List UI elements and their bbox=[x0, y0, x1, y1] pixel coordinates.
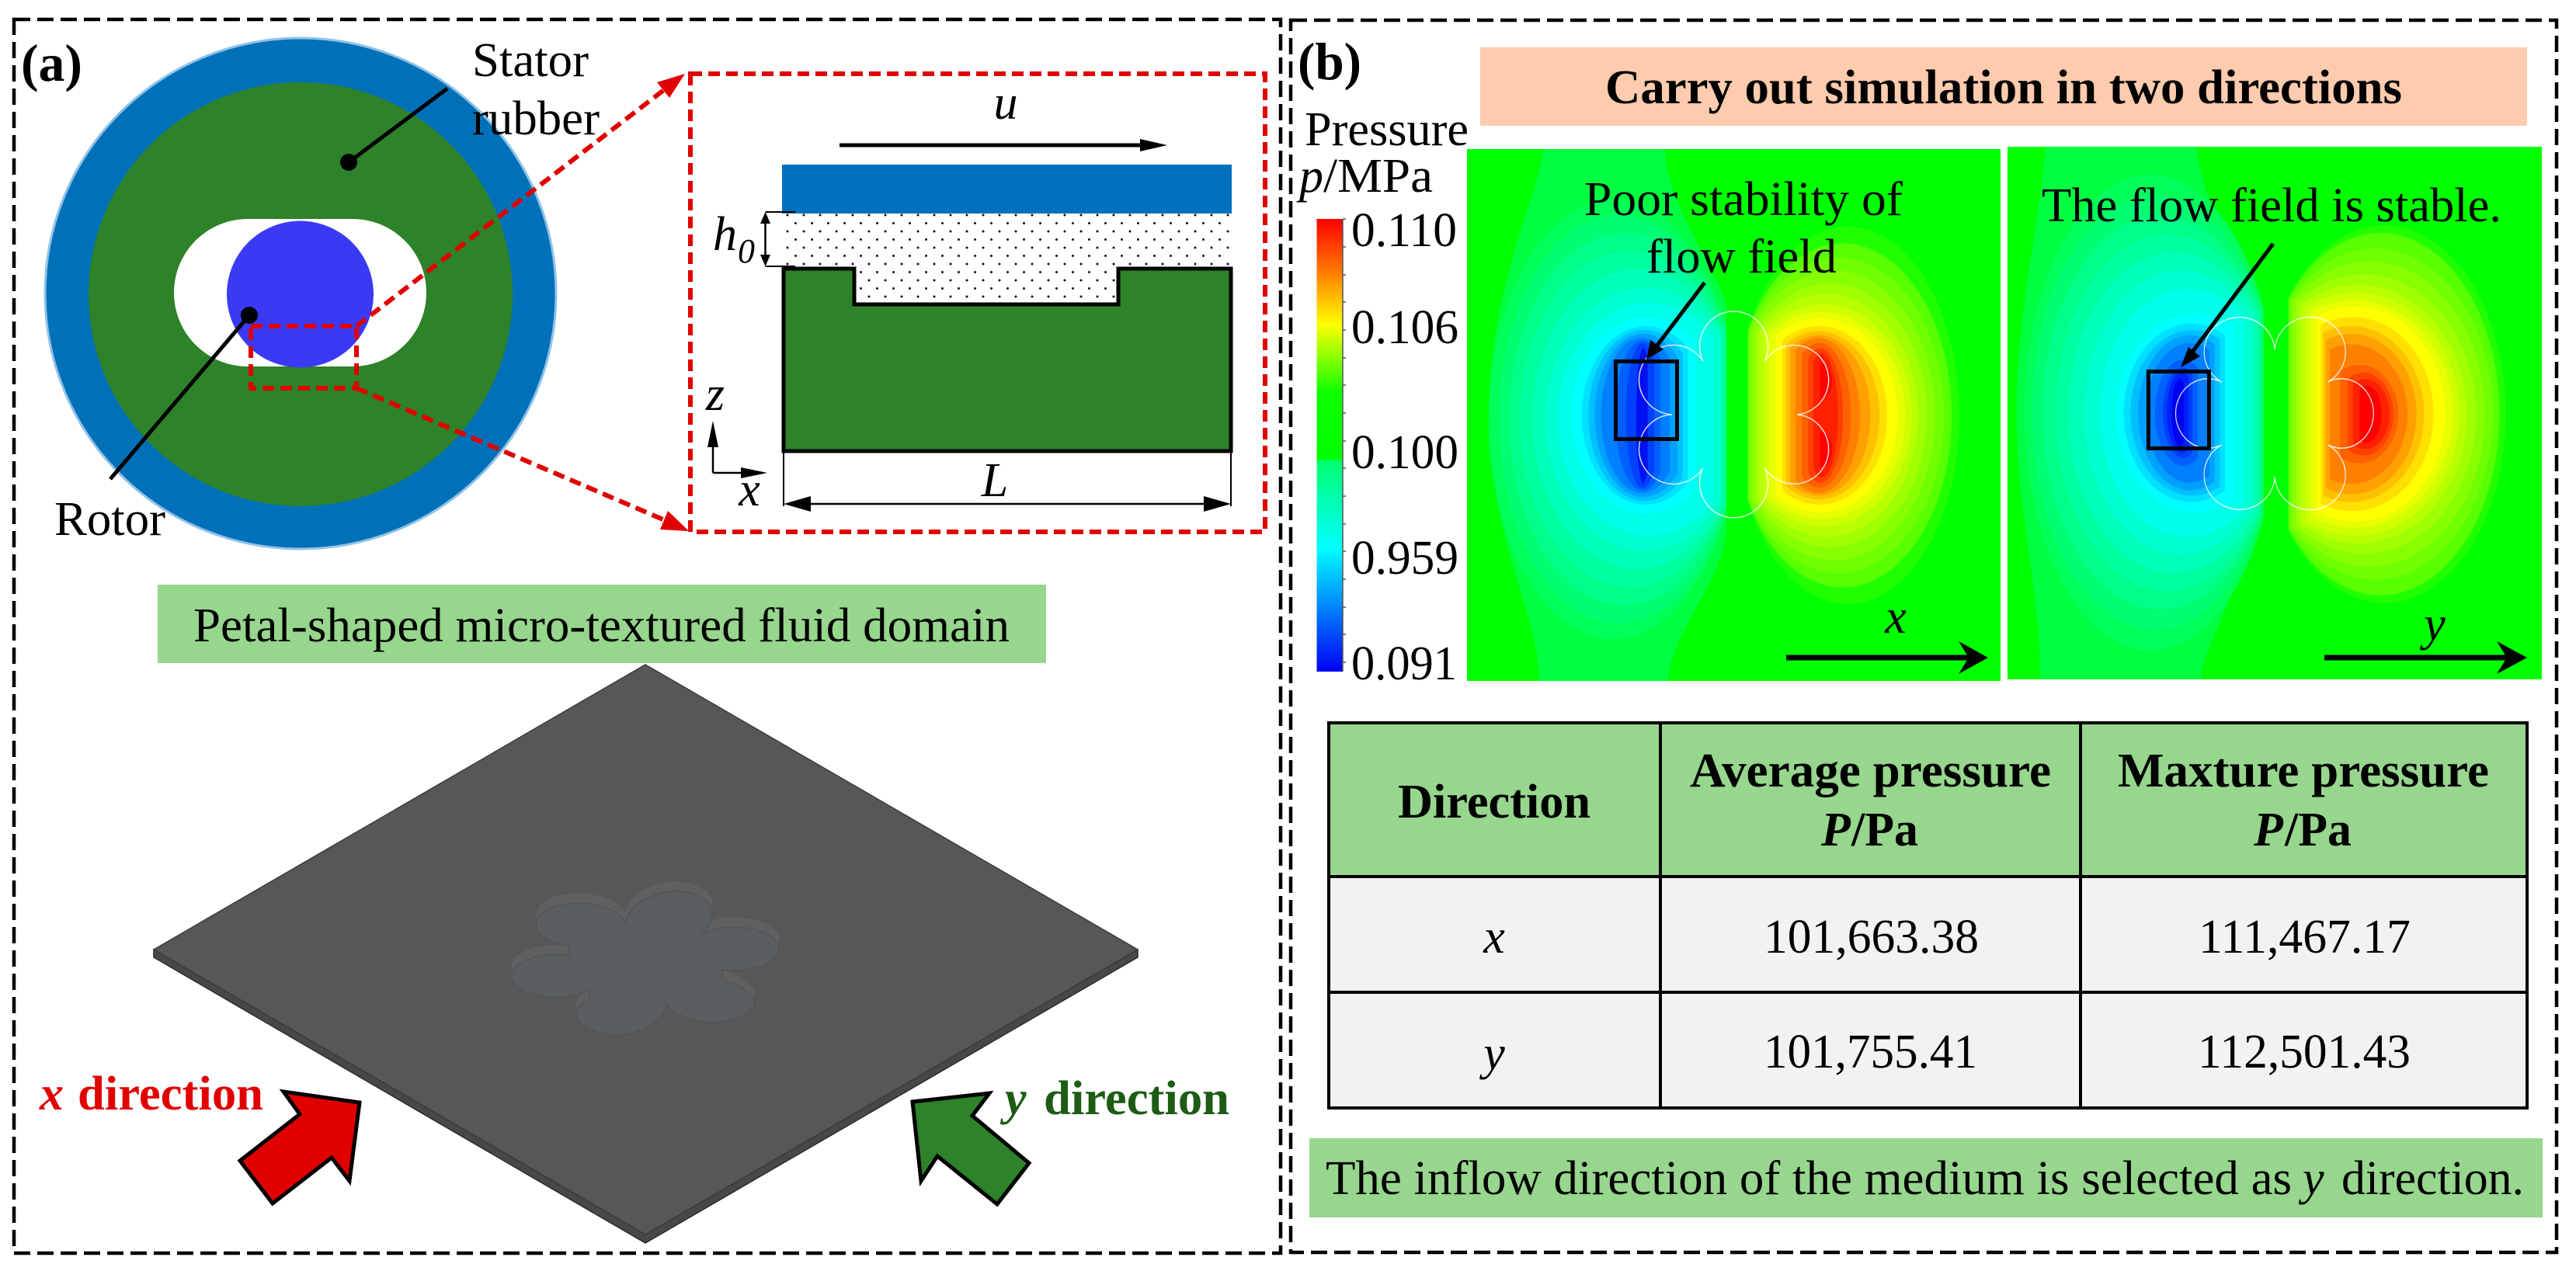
table header row: Direction bbox=[1398, 776, 1590, 828]
legend values: 0.106 bbox=[1351, 301, 1458, 354]
label: x direction: x bbox=[39, 1068, 64, 1120]
panel: (b) simulation results bbox=[1291, 20, 2557, 1252]
panel label (b): (b) bbox=[1298, 32, 1361, 91]
table row: y: 112,501.43 bbox=[2198, 1026, 2411, 1078]
label: stator rubber bbox=[472, 34, 600, 145]
dimension: h0 bbox=[713, 208, 795, 270]
arrow: y flow direction bbox=[2324, 598, 2527, 674]
leader line: stator rubber bbox=[340, 89, 447, 171]
petal texture bbox=[512, 882, 779, 1035]
3D plate with petal texture bbox=[154, 665, 1138, 1243]
heading: carry out simulation bbox=[1480, 47, 2527, 126]
arrow: velocity u bbox=[840, 139, 1167, 151]
callout box: stable region bbox=[2148, 371, 2209, 449]
arrow: zoom to detail, lower bbox=[356, 388, 689, 531]
zoom selection: red dashed box bbox=[251, 326, 356, 388]
panel: (a) geometry and fluid domain bbox=[14, 19, 1281, 1253]
dimension: L bbox=[784, 451, 1231, 512]
label: x direction: direction bbox=[78, 1068, 263, 1120]
table row: y: 101,755.41 bbox=[1764, 1026, 1977, 1078]
table header row: P bbox=[2253, 804, 2284, 856]
detail panel: texture cross-section bbox=[690, 74, 1265, 532]
callout text: poor stability bbox=[1584, 173, 1903, 283]
dimension: h0: h bbox=[713, 208, 737, 261]
label: stator rubber: Stator bbox=[472, 34, 589, 87]
panel label (a): (a) bbox=[21, 33, 82, 92]
contour map: x direction bbox=[1467, 149, 2001, 681]
table: pressure by direction bbox=[1329, 723, 2527, 1108]
table header row bbox=[1329, 723, 2527, 877]
table row: x: 101,663.38 bbox=[1764, 911, 1979, 964]
table row: x bbox=[1329, 877, 2527, 992]
stator layer bar bbox=[782, 165, 1232, 214]
arrow: to stable region bbox=[2181, 244, 2273, 367]
arrow: to poor stability region bbox=[1646, 283, 1705, 359]
arrow: y flow direction: y bbox=[2419, 598, 2446, 651]
label: y direction: direction bbox=[1044, 1072, 1229, 1125]
heading: petal-shaped fluid domain: Petal-shaped micro-textured fluid domain bbox=[193, 599, 1010, 652]
arrow: x direction bbox=[240, 1092, 360, 1203]
contour map: y direction bbox=[2008, 147, 2542, 679]
table header row: Maxture pressure bbox=[2118, 745, 2489, 797]
legend values: 0.100 bbox=[1351, 426, 1458, 479]
label: y direction: y bbox=[999, 1072, 1027, 1125]
arrow: y direction bbox=[913, 1093, 1029, 1204]
label: rotor: Rotor bbox=[54, 493, 165, 546]
arrow: zoom to detail, upper bbox=[356, 74, 685, 326]
legend values: 0.959 bbox=[1351, 532, 1458, 585]
arrow: x flow direction bbox=[1786, 591, 1988, 674]
dimension: h0: 0 bbox=[738, 232, 755, 270]
axes: z and x: x bbox=[738, 464, 760, 516]
callout text: stable flow: The flow field is stable. bbox=[2042, 179, 2501, 232]
heading: carry out simulation: Carry out simulation in two directions bbox=[1605, 61, 2402, 114]
table row: x: x bbox=[1483, 911, 1505, 964]
conclusion banner: direction. bbox=[2341, 1152, 2524, 1205]
callout box: poor stability region bbox=[1615, 362, 1677, 439]
conclusion banner bbox=[1309, 1138, 2543, 1217]
legend title: pressure: /MPa bbox=[1323, 150, 1433, 203]
legend title: pressure: Pressure bbox=[1305, 103, 1469, 156]
table row: y bbox=[1329, 992, 2527, 1108]
conclusion banner: y bbox=[2298, 1152, 2324, 1205]
heading: petal-shaped fluid domain bbox=[158, 585, 1046, 663]
table header row: /Pa bbox=[2284, 804, 2352, 856]
table row: y: y bbox=[1479, 1027, 1505, 1080]
table header row: /Pa bbox=[1851, 804, 1918, 856]
table row: x: 111,467.17 bbox=[2199, 911, 2411, 964]
diagram: stator and rotor cross-section bbox=[45, 38, 556, 549]
legend title: pressure bbox=[1296, 103, 1469, 203]
axes: z and x bbox=[705, 368, 767, 516]
callout text: poor stability: flow field bbox=[1646, 231, 1837, 283]
fluid film: dotted bbox=[782, 214, 1232, 304]
leader line: rotor bbox=[110, 307, 258, 479]
rubber layer with groove bbox=[784, 269, 1231, 451]
table header row: Average pressure bbox=[1690, 745, 2051, 797]
legend title: pressure: p bbox=[1296, 150, 1323, 203]
dimension: L: L bbox=[981, 454, 1008, 507]
legend values: 0.091 bbox=[1351, 637, 1457, 690]
legend: colour bar bbox=[1317, 204, 1458, 690]
callout text: poor stability: Poor stability of bbox=[1584, 173, 1903, 226]
axes: z and x: z bbox=[705, 368, 725, 421]
label: u: u bbox=[994, 77, 1017, 130]
table header row: P bbox=[1820, 804, 1851, 856]
legend values bbox=[1351, 204, 1458, 690]
label: stator rubber: rubber bbox=[472, 92, 600, 145]
legend values: 0.110 bbox=[1351, 204, 1457, 257]
arrow: x flow direction: x bbox=[1884, 591, 1907, 644]
conclusion banner: The inflow direction of the medium is selected as bbox=[1326, 1152, 2292, 1205]
